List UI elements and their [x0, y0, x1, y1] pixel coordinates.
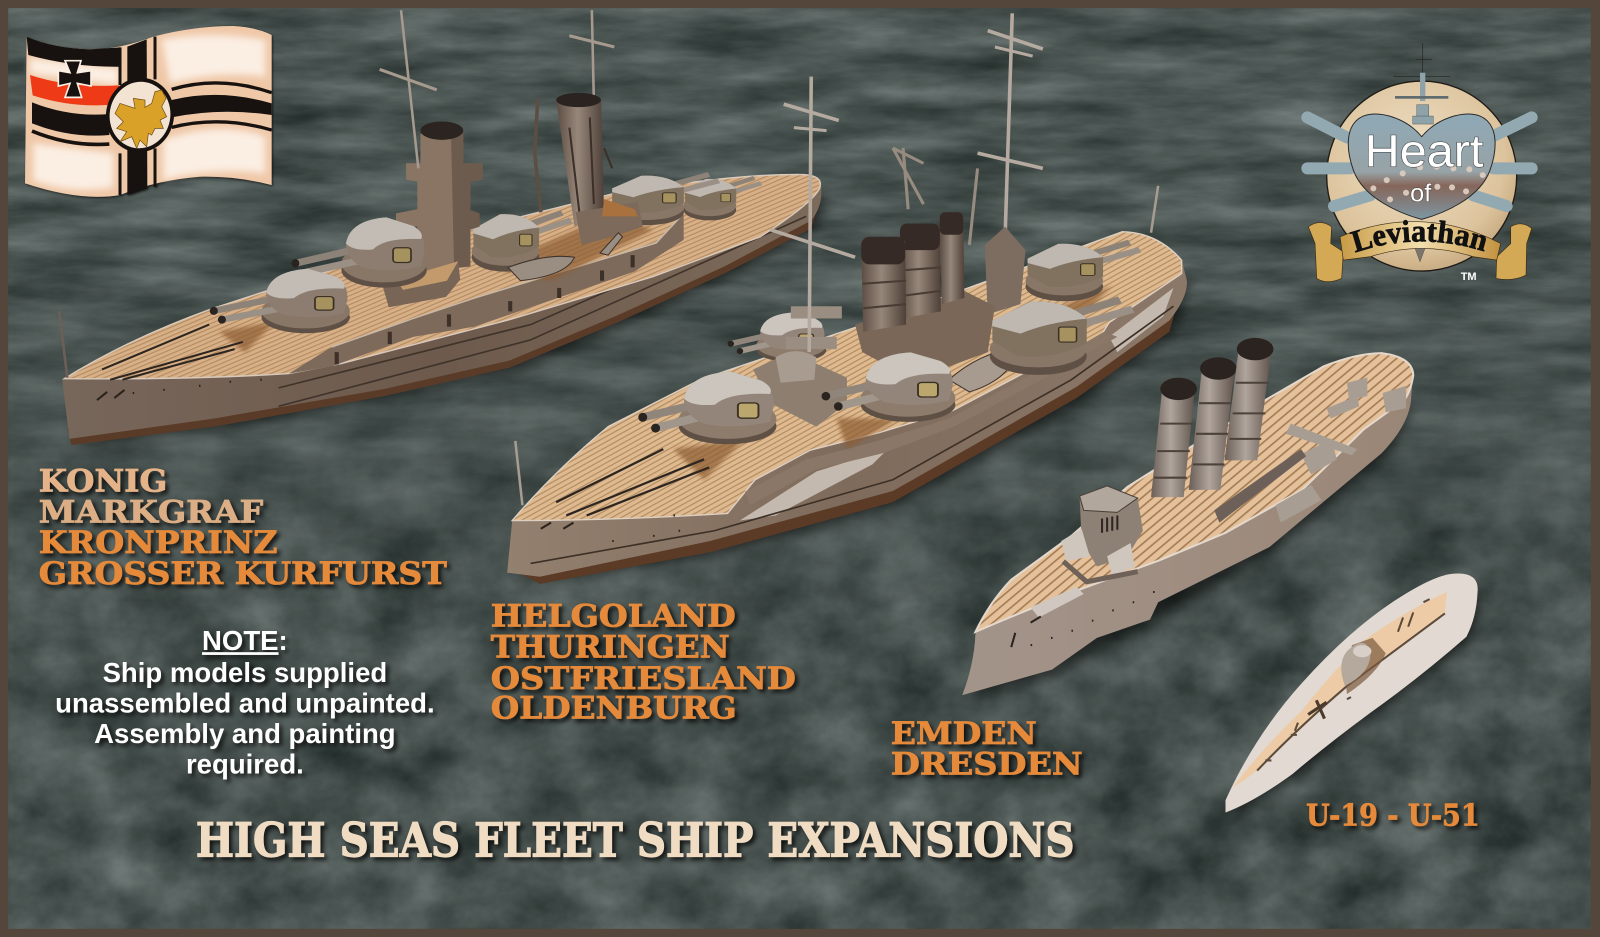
bridge: [1080, 486, 1143, 566]
flag: vertical band: [127, 39, 147, 195]
logo: disc: [1327, 81, 1517, 271]
portholes: [97, 380, 262, 400]
casemate gun ports: [337, 255, 633, 364]
aft staff: [1151, 186, 1158, 233]
logo: top mast: [1393, 43, 1450, 77]
logo: word Leviathan: Leviathan: [1349, 220, 1486, 253]
label: Emden class names: EMDEN: [891, 716, 1037, 752]
logo: mast and turret: [1395, 73, 1448, 124]
forward bridge: [753, 352, 847, 427]
flag: golden eagle: [115, 90, 167, 148]
bridge cap: [420, 121, 463, 140]
label: Konig class names: KRONPRINZ: [39, 525, 278, 561]
logo: guns: [1307, 117, 1532, 206]
forward gun shields: [1061, 529, 1135, 577]
bridge platforms: [786, 306, 842, 349]
ship shadow: [967, 403, 1416, 698]
rear mast: [569, 10, 614, 102]
funnel cap: [556, 93, 601, 107]
logo: word Heart: Heart: [1365, 126, 1484, 177]
funnel stiffeners: [569, 117, 612, 214]
hull light patches: [740, 288, 1173, 521]
crane: [893, 148, 978, 245]
flag: eagle disc: [100, 72, 180, 158]
deck gun: [1308, 700, 1327, 719]
deck shadows: [673, 286, 1112, 480]
forward mast: [380, 10, 437, 168]
funnel 2: [1189, 357, 1237, 490]
label: U-boat names: U-19 - U-51: [1306, 798, 1480, 833]
forward deck fittings: [1031, 587, 1084, 618]
midship turret: [472, 213, 571, 272]
hull belt line: [531, 306, 1173, 563]
turret C: [990, 300, 1133, 375]
casemate band: [289, 213, 684, 374]
casemate top edge: [332, 213, 684, 347]
breakwater: [1063, 561, 1138, 582]
portholes: [1011, 592, 1155, 647]
flag: right band: [172, 95, 272, 117]
turret A: [638, 371, 776, 444]
hull underside: [507, 281, 1184, 584]
flag: pale panels: [30, 35, 265, 190]
main deck planking: [64, 174, 820, 379]
ship boats: [508, 233, 622, 281]
turret A: [210, 269, 350, 333]
funnel 1: [861, 237, 906, 332]
casemate edge: [745, 332, 1117, 505]
label: Helgoland class names: [491, 599, 796, 727]
hull side: [507, 260, 1187, 577]
conning tower: [1341, 638, 1386, 694]
label: Helgoland class names: HELGOLAND: [491, 599, 736, 635]
flag: lower left thin line: [32, 131, 109, 144]
note text block: required.: [186, 749, 304, 780]
funnel 3: [940, 212, 964, 304]
turret B: [822, 352, 955, 422]
label: Konig class names: MARKGRAF: [39, 495, 264, 531]
flag: centre left band: [32, 102, 109, 136]
note text block: Ship models supplied: [103, 657, 387, 688]
central boat deck: [1214, 449, 1306, 523]
label: Helgoland class names: OSTFRIESLAND: [491, 661, 796, 697]
aft bridge: [985, 227, 1026, 314]
flag: vertical thin lines: [120, 37, 155, 195]
deck shadows: [219, 214, 653, 352]
ship: U-boat submarine: [1226, 573, 1482, 817]
flag: iron cross: [58, 61, 91, 97]
forward flagstaff: [515, 441, 522, 505]
upper deck: [1233, 592, 1447, 787]
thin centre mast: [535, 99, 541, 212]
turret B: [291, 217, 427, 288]
logo: banner point: [1415, 248, 1425, 262]
funnel: [556, 100, 604, 227]
hull underside: [67, 194, 821, 445]
logo: steel heart: [1348, 114, 1495, 219]
hull side: [62, 182, 821, 439]
bridge top: [1080, 486, 1138, 512]
logo: banner: [1340, 222, 1501, 260]
label: Konig class names: GROSSER KURFURST: [39, 556, 447, 592]
anchor chains: [556, 449, 709, 515]
forward mast: [770, 77, 855, 352]
aft deck fittings: [1276, 378, 1406, 523]
logo: trademark: TM: [1461, 271, 1477, 283]
logo: word of: of: [1410, 180, 1432, 208]
title: HIGH SEAS FLEET SHIP EXPANSIONS: [196, 813, 1074, 868]
flag: canton black band: [27, 37, 120, 67]
logo: left scroll tail: [1308, 223, 1343, 282]
logo: right scroll tail: [1496, 224, 1532, 280]
flag: right thin lines: [172, 83, 272, 130]
breakwater deck: [396, 261, 458, 290]
deck planking: [512, 232, 1182, 521]
funnel base block: [855, 291, 995, 380]
logo: rivets: [1373, 167, 1483, 199]
flag: red stripe: [30, 75, 119, 105]
wing turret: [728, 313, 826, 362]
anchor chains: [102, 325, 243, 380]
deck planking: [976, 353, 1413, 632]
funnel 2: [900, 224, 941, 318]
ship: Konig class battleship: [59, 10, 827, 447]
deck fittings: [1265, 599, 1430, 760]
forward flagstaff: [59, 311, 67, 378]
note text block: [55, 625, 435, 780]
bridge shading: [451, 134, 483, 268]
label: Konig class names: [39, 463, 447, 592]
portholes: [541, 515, 680, 541]
aft mast: [978, 13, 1043, 237]
note text block: unassembled and unpainted.: [55, 687, 435, 718]
ship shadow: [1230, 587, 1482, 817]
label: Emden class names: [891, 716, 1083, 783]
label: Emden class names: DRESDEN: [891, 747, 1083, 783]
ship shadow: [73, 194, 827, 447]
label: Helgoland class names: THURINGEN: [491, 629, 730, 665]
ship boats: [949, 347, 1020, 392]
outer hull: [1226, 573, 1478, 812]
bridge windows: [1102, 515, 1117, 533]
note text block: NOTE:: [202, 625, 288, 656]
hull armour belt lines: [279, 204, 806, 406]
ship: Helgoland class battleship: [507, 13, 1192, 584]
aft turret: [1026, 242, 1140, 301]
aft turrets: [610, 174, 761, 225]
breakwater: [382, 261, 460, 307]
note text block: Assembly and painting: [94, 718, 396, 749]
flag: German naval ensign: [25, 26, 272, 197]
ship: Emden class cruiser: [962, 338, 1416, 698]
funnel 1: [1151, 378, 1197, 497]
aft superstructure: [576, 202, 643, 245]
deck shadow line: [1257, 613, 1445, 771]
funnel 3: [1224, 338, 1273, 460]
ship shadow: [510, 276, 1192, 582]
bridge top: [776, 351, 816, 383]
flag: cloth: [25, 26, 272, 197]
logo: Heart of Leviathan: [1301, 43, 1538, 283]
aft superstructure deck: [602, 199, 638, 216]
label: Helgoland class names: OLDENBURG: [491, 691, 737, 727]
hull side: [962, 369, 1413, 695]
bridge tower: [396, 134, 483, 272]
label: Konig class names: KONIG: [39, 463, 167, 499]
